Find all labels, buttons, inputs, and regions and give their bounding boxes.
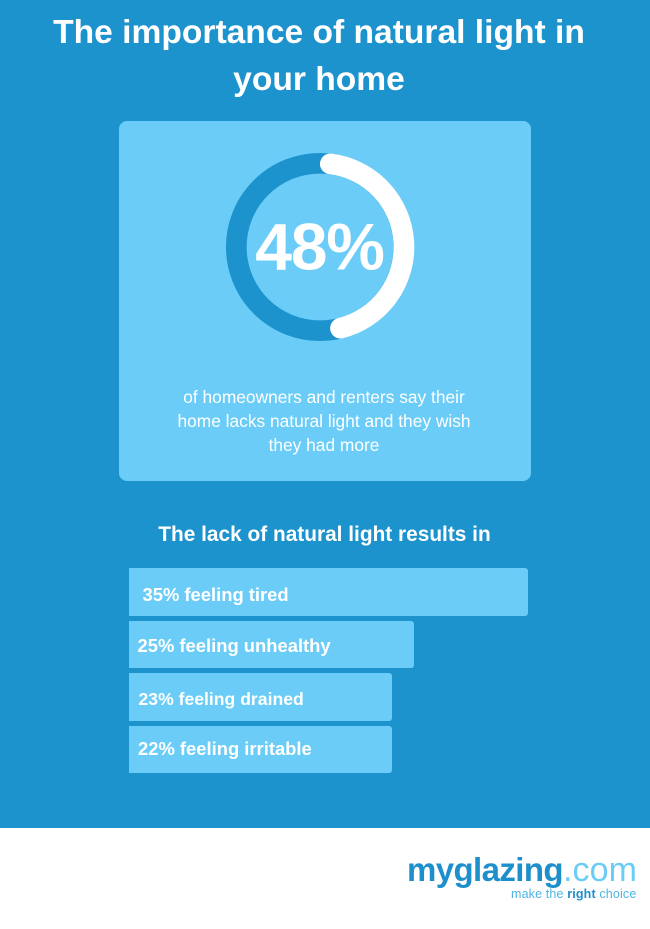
- logo: myglazing.com: [407, 851, 637, 901]
- bar: 23% feeling drained: [128, 673, 392, 720]
- bar: 25% feeling unhealthy: [128, 621, 414, 668]
- subheading: The lack of natural light results in: [158, 523, 491, 546]
- description text: of homeowners and renters say their: [183, 387, 465, 407]
- title: [53, 14, 585, 98]
- bar: 22% feeling irritable: [128, 726, 392, 773]
- donut chart: 48%: [255, 209, 384, 283]
- logo tagline: make the right choice: [511, 887, 636, 901]
- donut chart: [226, 153, 414, 341]
- panel: 48% statistic: [118, 121, 530, 481]
- description text: home lacks natural light and they wish: [177, 411, 471, 431]
- bar: 22% feeling irritable: 22% feeling irritable: [138, 738, 312, 758]
- bar: 25% feeling unhealthy: 25% feeling unhealthy: [138, 635, 331, 656]
- description text: they had more: [269, 435, 379, 455]
- bar: 35% feeling tired: 35% feeling tired: [142, 584, 289, 605]
- title: your home: [233, 61, 405, 98]
- bar: 23% feeling drained: 23% feeling drained: [138, 689, 304, 709]
- description text: [177, 387, 471, 455]
- title: The importance of natural light in: [53, 14, 585, 51]
- bar: 35% feeling tired: [128, 568, 528, 616]
- logo wordmark: myglazing.com: [407, 851, 637, 889]
